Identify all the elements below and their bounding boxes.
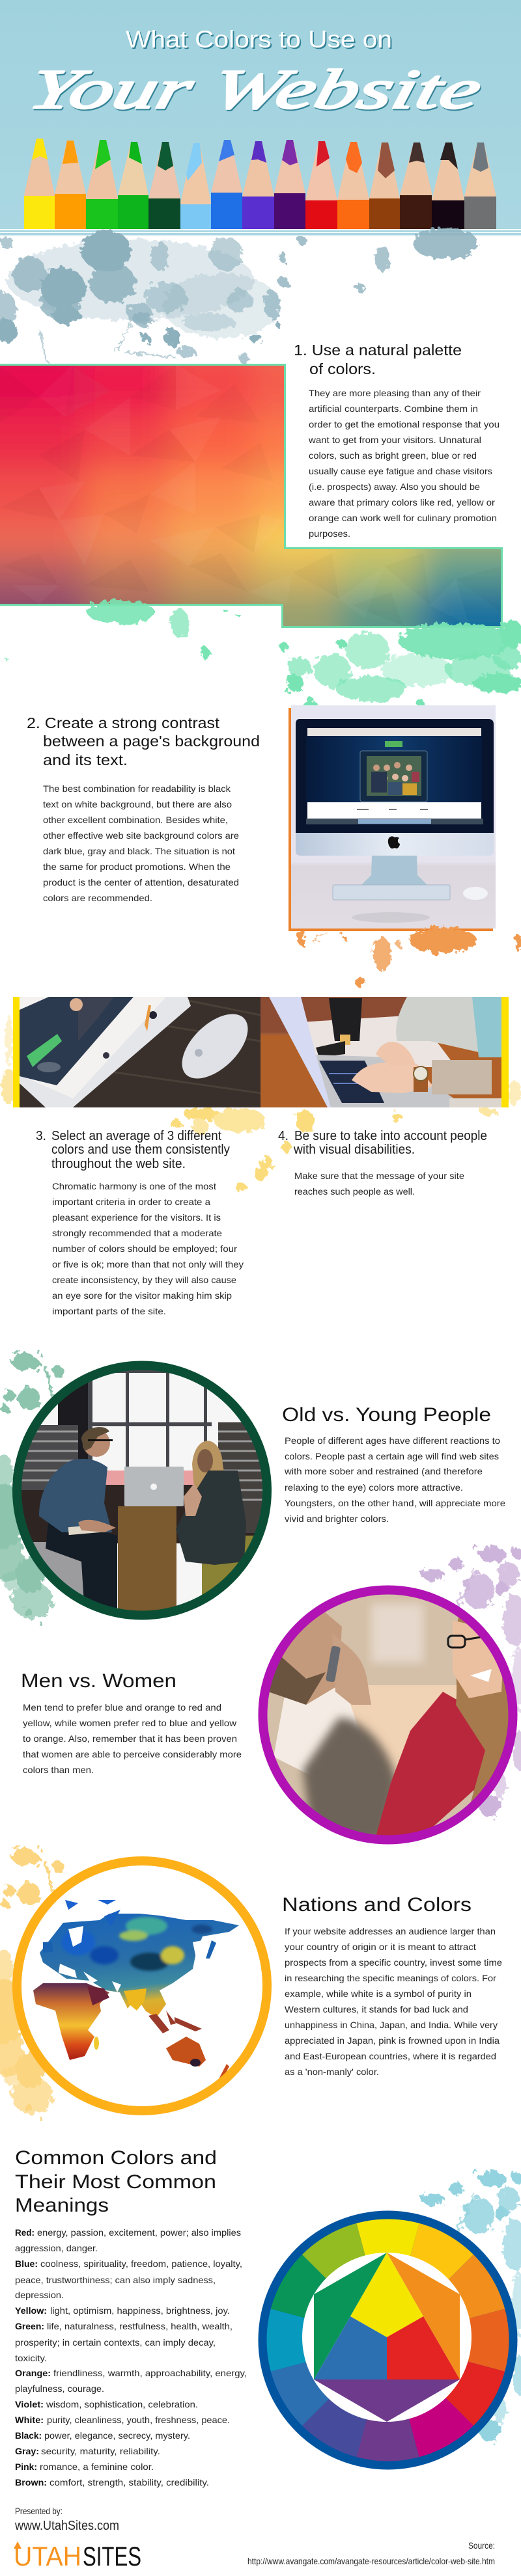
- body text 2: other excellent combination. Besides white,: [43, 815, 228, 825]
- list of colour meanings: White:: [15, 2415, 44, 2425]
- coastline gaps: [59, 1926, 208, 1992]
- body text 3: [52, 1181, 244, 1316]
- presented by footer: [14, 2506, 141, 2571]
- heading: [15, 2147, 217, 2216]
- list of colour meanings: life, naturalness, restfulness, health, wealth,: [47, 2321, 232, 2331]
- body text 2: colors are recommended.: [43, 893, 152, 903]
- title script line: Your Website: Your Website: [23, 58, 488, 120]
- body text: relaxing to the eye) colors more attractive.: [285, 1482, 463, 1493]
- colour wheel: [253, 2205, 521, 2475]
- header banner: [0, 0, 521, 236]
- inner colour triangles: [314, 2253, 460, 2422]
- list of colour meanings: coolness, spirituality, freedom, patience, loyalty,: [40, 2258, 242, 2269]
- Utah Sites logo: [14, 2541, 141, 2571]
- row of coloured pencils: [24, 139, 496, 229]
- list of colour meanings: toxicity.: [15, 2353, 47, 2363]
- source citation: Source:: [468, 2540, 495, 2551]
- body text: If your website addresses an audience larger than: [285, 1926, 496, 1936]
- heading: Old vs. Young People: [282, 1404, 491, 1426]
- body text: [23, 1702, 242, 1775]
- list of colour meanings: Violet:: [15, 2399, 44, 2409]
- list of colour meanings: Pink:: [15, 2461, 37, 2472]
- white centre: [302, 2253, 472, 2422]
- body text 2: [43, 783, 239, 903]
- heading 1: 1. Use a natural palette: [294, 342, 462, 359]
- heading 1: [294, 342, 462, 377]
- body text 1: want to get from your visitors. Unnatural: [308, 435, 481, 445]
- website address: www.UtahSites.com: [14, 2519, 119, 2533]
- body text: example, while white is a symbol of purity in: [285, 1988, 472, 1999]
- body text 1: artificial counterparts. Combine them in: [309, 403, 478, 414]
- body text 3: important criteria in order to create a: [52, 1197, 210, 1207]
- mouse: [463, 887, 488, 900]
- heading 4: [278, 1129, 487, 1157]
- photo strip: tablet and laptop: [13, 997, 509, 1107]
- heading 2: [27, 714, 260, 768]
- body text: to orange. Also, remember that it has been proven: [23, 1733, 237, 1744]
- photo: tablet and mouse on dark desk: [20, 997, 260, 1107]
- body text 3: number of colors should be employed; four: [52, 1243, 237, 1254]
- body text: appreciated in Japan, pink is frowned upon in India: [285, 2035, 500, 2046]
- list of colour meanings: Blue:: [15, 2258, 38, 2269]
- body text 1: purposes.: [309, 528, 350, 539]
- section: nations and colors: [17, 1861, 502, 2111]
- body text: [284, 1435, 505, 1524]
- heading 2: between a page's background: [43, 733, 260, 750]
- list of colour meanings: Gray:: [15, 2446, 39, 2456]
- body text 4: Make sure that the message of your site: [294, 1171, 464, 1181]
- Eurasia colour detail: [61, 1917, 212, 1971]
- list of colour meanings: playfulness, courage.: [15, 2383, 104, 2394]
- body text 3: or five is ok; more than that not only will they: [52, 1259, 244, 1269]
- section: men vs women: [21, 1585, 518, 1845]
- list of colour meanings: friendliness, warmth, approachability, energy,: [53, 2368, 247, 2378]
- dark green paint splatter: [0, 1351, 63, 1625]
- Utah Sites logo: SITES: [83, 2541, 141, 2571]
- desk shadow: [352, 912, 430, 923]
- Arabia: [87, 1986, 109, 2005]
- monitor: [296, 719, 494, 856]
- list of colour meanings: energy, passion, excitement, power; also implies: [37, 2227, 241, 2238]
- list of colour meanings: wisdom, sophistication, celebration.: [46, 2399, 198, 2409]
- body text 1: colors, such as bright green, blue or red: [309, 450, 477, 461]
- heading 3: Select an average of 3 different: [51, 1129, 221, 1143]
- header background: [0, 0, 521, 236]
- body text: prospects from a specific country, invest some time: [285, 1957, 502, 1968]
- purple paint splatter: [420, 1545, 521, 1817]
- body text 3: strongly recommended that a moderate: [52, 1228, 222, 1238]
- monitor stand: [361, 856, 427, 885]
- heading 3: throughout the web site.: [51, 1157, 186, 1171]
- heading: Common Colors and: [15, 2147, 217, 2169]
- heading 2: and its text.: [43, 752, 128, 768]
- photo: hands typing on laptop: [260, 997, 501, 1107]
- heading 4: Be sure to take into account people: [294, 1129, 487, 1143]
- Utah Sites logo: UTAH: [14, 2541, 81, 2571]
- heading: Men vs. Women: [21, 1670, 176, 1692]
- body text: your country of origin or it is meant to attract: [285, 1942, 476, 1952]
- body text: yellow, while women prefer red to blue and yellow: [23, 1718, 237, 1728]
- heading 4: 4.: [278, 1129, 289, 1143]
- body text 4: reaches such people as well.: [294, 1186, 415, 1197]
- body text: colors than men.: [23, 1765, 94, 1775]
- heading 2: 2. Create a strong contrast: [27, 714, 220, 731]
- section 2: strong contrast: [27, 705, 496, 931]
- body text: that women are able to perceive considerably more: [23, 1749, 242, 1759]
- title line: What Colors to Use on: What Colors to Use on: [126, 26, 392, 53]
- teal paint splatter: [420, 2169, 521, 2442]
- body text: with more sober and restrained (and therefore: [284, 1466, 483, 1476]
- list of colour meanings: Green:: [15, 2321, 44, 2331]
- body text: People of different ages have different reactions to: [285, 1435, 500, 1446]
- photo: desktop computer with orange frame: [289, 705, 496, 931]
- body text: unhappiness in China, Japan, and India. While very: [285, 2020, 498, 2030]
- circular photo: man and woman on the phone: [258, 1585, 518, 1845]
- heading 3: 3.: [36, 1129, 46, 1143]
- body text 1: orange can work well for culinary promotion: [309, 513, 497, 523]
- grey-blue paint splatter: [0, 228, 478, 364]
- body text 1: [308, 388, 500, 539]
- section 4: visual disabilities: [278, 1129, 487, 1197]
- body text 3: important parts of the site.: [52, 1306, 166, 1316]
- list of colour meanings: Black:: [15, 2430, 42, 2441]
- list of colour meanings: romance, a feminine color.: [40, 2461, 154, 2472]
- list of colour meanings: depression.: [15, 2290, 64, 2300]
- body text: [285, 1926, 502, 2077]
- heading: Nations and Colors: [282, 1894, 472, 1916]
- section: old vs young people: [12, 1361, 505, 1620]
- body text: Western cultures, it stands for bad luck and: [285, 2004, 468, 2014]
- twelve colour segments: [267, 2219, 509, 2461]
- keyboard: [333, 885, 450, 900]
- body text 1: usually cause eye fatigue and chase visitors: [309, 466, 492, 476]
- heading 3: colors and use them consistently: [51, 1143, 230, 1157]
- gold paint splatter: [0, 1847, 63, 2121]
- body text 2: product is the center of attention, desaturated: [43, 877, 239, 888]
- India: [124, 1988, 147, 2011]
- body text 3: pleasant experience for the visitors. It is: [52, 1212, 221, 1223]
- Australia and islands: [65, 1900, 229, 2081]
- body text 2: The best combination for readability is black: [43, 783, 231, 794]
- body text 2: dark blue, gray and black. The situation is not: [43, 846, 235, 856]
- heading: Their Most Common: [15, 2171, 216, 2193]
- heading 3: [36, 1129, 230, 1171]
- body text: Men tend to prefer blue and orange to red and: [23, 1702, 221, 1713]
- body text: as a 'non-manly' color.: [285, 2067, 379, 2077]
- body text 1: order to get the emotional response that you: [309, 419, 500, 429]
- heading 1: of colors.: [309, 360, 376, 377]
- body text 1: (i.e. prospects) away. Also you should be: [309, 481, 480, 492]
- Africa: [33, 1983, 109, 2060]
- body text 1: They are more pleasing than any of their: [309, 388, 481, 398]
- yellow side bars: [13, 997, 509, 1107]
- yellow paint splatter: [1, 1015, 521, 1193]
- list of colour meanings: Red:: [15, 2227, 35, 2238]
- circular photo: two people with laptop: [12, 1361, 272, 1620]
- list of colour meanings: aggression, danger.: [15, 2243, 98, 2253]
- list of colour meanings: security, maturity, reliability.: [41, 2446, 160, 2456]
- Eurasia: [40, 1914, 239, 2018]
- list of colour meanings: light, optimism, happiness, brightness, joy.: [50, 2305, 230, 2316]
- body text 3: Chromatic harmony is one of the most: [52, 1181, 216, 1191]
- body text: colors. People past a certain age will find web sites: [285, 1451, 499, 1461]
- section: common colors and meanings: [15, 2147, 521, 2488]
- body text 2: other effective web site background colors are: [43, 830, 239, 841]
- list of colour meanings: Brown:: [15, 2477, 47, 2488]
- low-poly gradient panel: [0, 364, 503, 628]
- list of colour meanings: prosperity; in certain contexts, can imply decay,: [15, 2337, 216, 2348]
- body text 2: text on white background, but there are also: [43, 799, 232, 809]
- list of colour meanings: Orange:: [15, 2368, 51, 2378]
- list of colour meanings: comfort, strength, stability, credibility.: [49, 2477, 209, 2488]
- section 3: average of 3 colors: [36, 1129, 244, 1316]
- list of colour meanings: power, elegance, secrecy, mystery.: [44, 2430, 190, 2441]
- list of colour meanings: purity, cleanliness, youth, freshness, peace.: [47, 2415, 230, 2425]
- heading 4: with visual disabilities.: [293, 1143, 415, 1157]
- list of colour meanings: Yellow:: [15, 2305, 47, 2316]
- orange paint splatter: [297, 927, 521, 988]
- heading: Meanings: [15, 2195, 109, 2216]
- section 1: natural palette: [0, 344, 503, 628]
- green paint splatter: [7, 600, 521, 709]
- source citation: [247, 2540, 495, 2566]
- body text: and East-European countries, where it is regarded: [285, 2051, 496, 2061]
- body text 1: aware that primary colors like red, yellow or: [309, 497, 495, 508]
- presented by label: Presented by:: [15, 2506, 63, 2516]
- header stripes: [0, 229, 521, 236]
- body text 2: the same for product promotions. When the: [43, 861, 231, 872]
- list of colour meanings: [15, 2227, 247, 2488]
- body text: vivid and brighter colors.: [285, 1513, 389, 1524]
- body text 4: [294, 1171, 464, 1197]
- list of colour meanings: peace, trustworthiness; can also imply sadness,: [15, 2275, 216, 2285]
- body text: Youngsters, on the other hand, will appreciate more: [285, 1498, 505, 1508]
- circular world map: [17, 1861, 267, 2111]
- body text 3: an eye sore for the visitor making him skip: [52, 1290, 232, 1301]
- body text: in researching the specific meanings of colors. For: [285, 1973, 496, 1983]
- British Isles and Japan: [43, 1940, 216, 1959]
- body text 3: create inconsistency, by they will also cause: [52, 1275, 236, 1285]
